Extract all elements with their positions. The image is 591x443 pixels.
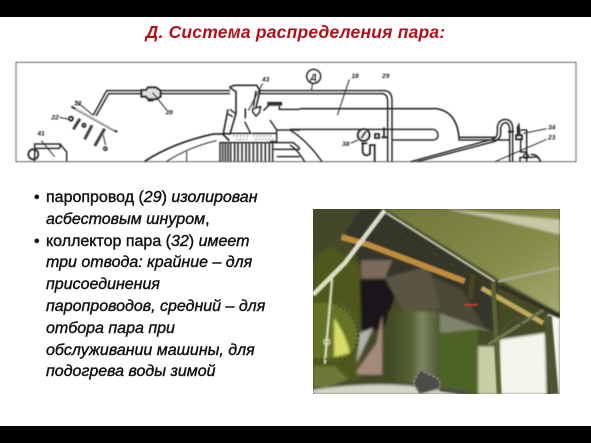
bottom black band: [0, 426, 591, 443]
label 32: 32: [74, 100, 82, 107]
diagram right portion: [290, 69, 547, 162]
bullet: steam pipe: асбестовым шнуром,: [46, 211, 210, 228]
boiler centre: chimney and tube stack: [220, 83, 300, 162]
label 41: 41: [36, 130, 45, 137]
label Д: Д: [309, 72, 317, 82]
label 18: 18: [351, 73, 359, 80]
dark upper recess: [335, 209, 498, 333]
tank 18: [290, 79, 510, 162]
dark cavity: [360, 280, 402, 331]
diagram: steam distribution system: [14, 61, 578, 164]
text: •: [34, 233, 40, 250]
label 34: 34: [548, 124, 556, 131]
label 22: 22: [50, 114, 59, 121]
vertical strut: [493, 283, 499, 394]
pinkish duct top: [362, 260, 392, 278]
wall under cylinder: [440, 313, 492, 333]
left green panel: [313, 233, 360, 380]
white diagonal rail: [313, 210, 385, 295]
bullet: steam collector: паропроводов, средний – для: [46, 298, 265, 315]
label 23: 23: [547, 134, 556, 141]
valve assembly: [470, 275, 473, 300]
striped radiator: [356, 315, 382, 375]
grey duct: [385, 266, 442, 311]
label 39: 39: [165, 110, 173, 117]
diagram labels: [36, 72, 556, 148]
bullet: steam collector: подогрева воды зимой: [46, 363, 216, 380]
pressure gauge 38: [351, 127, 387, 162]
steam collector 32 with three taps: [59, 101, 117, 150]
grey lower left light: [356, 328, 373, 363]
floor: [313, 384, 468, 394]
title: Д. Система распределения пара:: [146, 22, 445, 42]
photo: steam pipe inside machine cab: [313, 209, 560, 394]
cloth bundle: [413, 370, 468, 394]
label 38: 38: [342, 141, 350, 148]
roof shadow strip: [500, 286, 560, 316]
bullet: steam pipe: [34, 189, 258, 228]
right post: [548, 316, 555, 394]
cab outline left: [145, 134, 229, 161]
bullet: steam collector: коллектор пара (32) имеет: [46, 233, 249, 250]
circled marker Д: [307, 69, 321, 91]
right box: [440, 328, 478, 394]
bullet text block: [34, 189, 266, 380]
bullet: steam collector: [34, 233, 266, 380]
right white bright opening: [478, 346, 498, 394]
bright reflection on hatch: [334, 318, 350, 357]
central cylinder: [388, 311, 440, 383]
insulated yellow steam pipe: [342, 237, 465, 281]
diagram frame: [16, 62, 576, 162]
top black band: [0, 0, 591, 17]
bullet: steam collector: обслуживании машины, для: [46, 342, 255, 359]
chain hook: [325, 278, 332, 364]
hatch bolts ring: [313, 303, 358, 359]
label 29: 29: [381, 73, 390, 80]
bullet: steam collector: отбора пара при: [46, 320, 175, 337]
inclined pipe and U-bend: [411, 119, 514, 162]
steam pipe left section: [93, 91, 392, 162]
bullet: steam collector: присоединения: [46, 276, 160, 293]
valve 30: [141, 87, 167, 110]
roof panel: [385, 209, 560, 313]
safety valve 34 and lever 23: [495, 125, 547, 162]
text: •: [34, 189, 40, 206]
roof edge: [386, 213, 495, 281]
photo background wall: [305, 200, 572, 406]
unit 41 box: [28, 141, 67, 161]
bullet: steam pipe: паропровод (29) изолирован: [46, 189, 258, 206]
label 43: 43: [261, 77, 270, 84]
bullet: steam collector: три отвода: крайние – для: [46, 254, 252, 271]
folded brace: [488, 308, 546, 345]
round hatch: [313, 303, 358, 360]
